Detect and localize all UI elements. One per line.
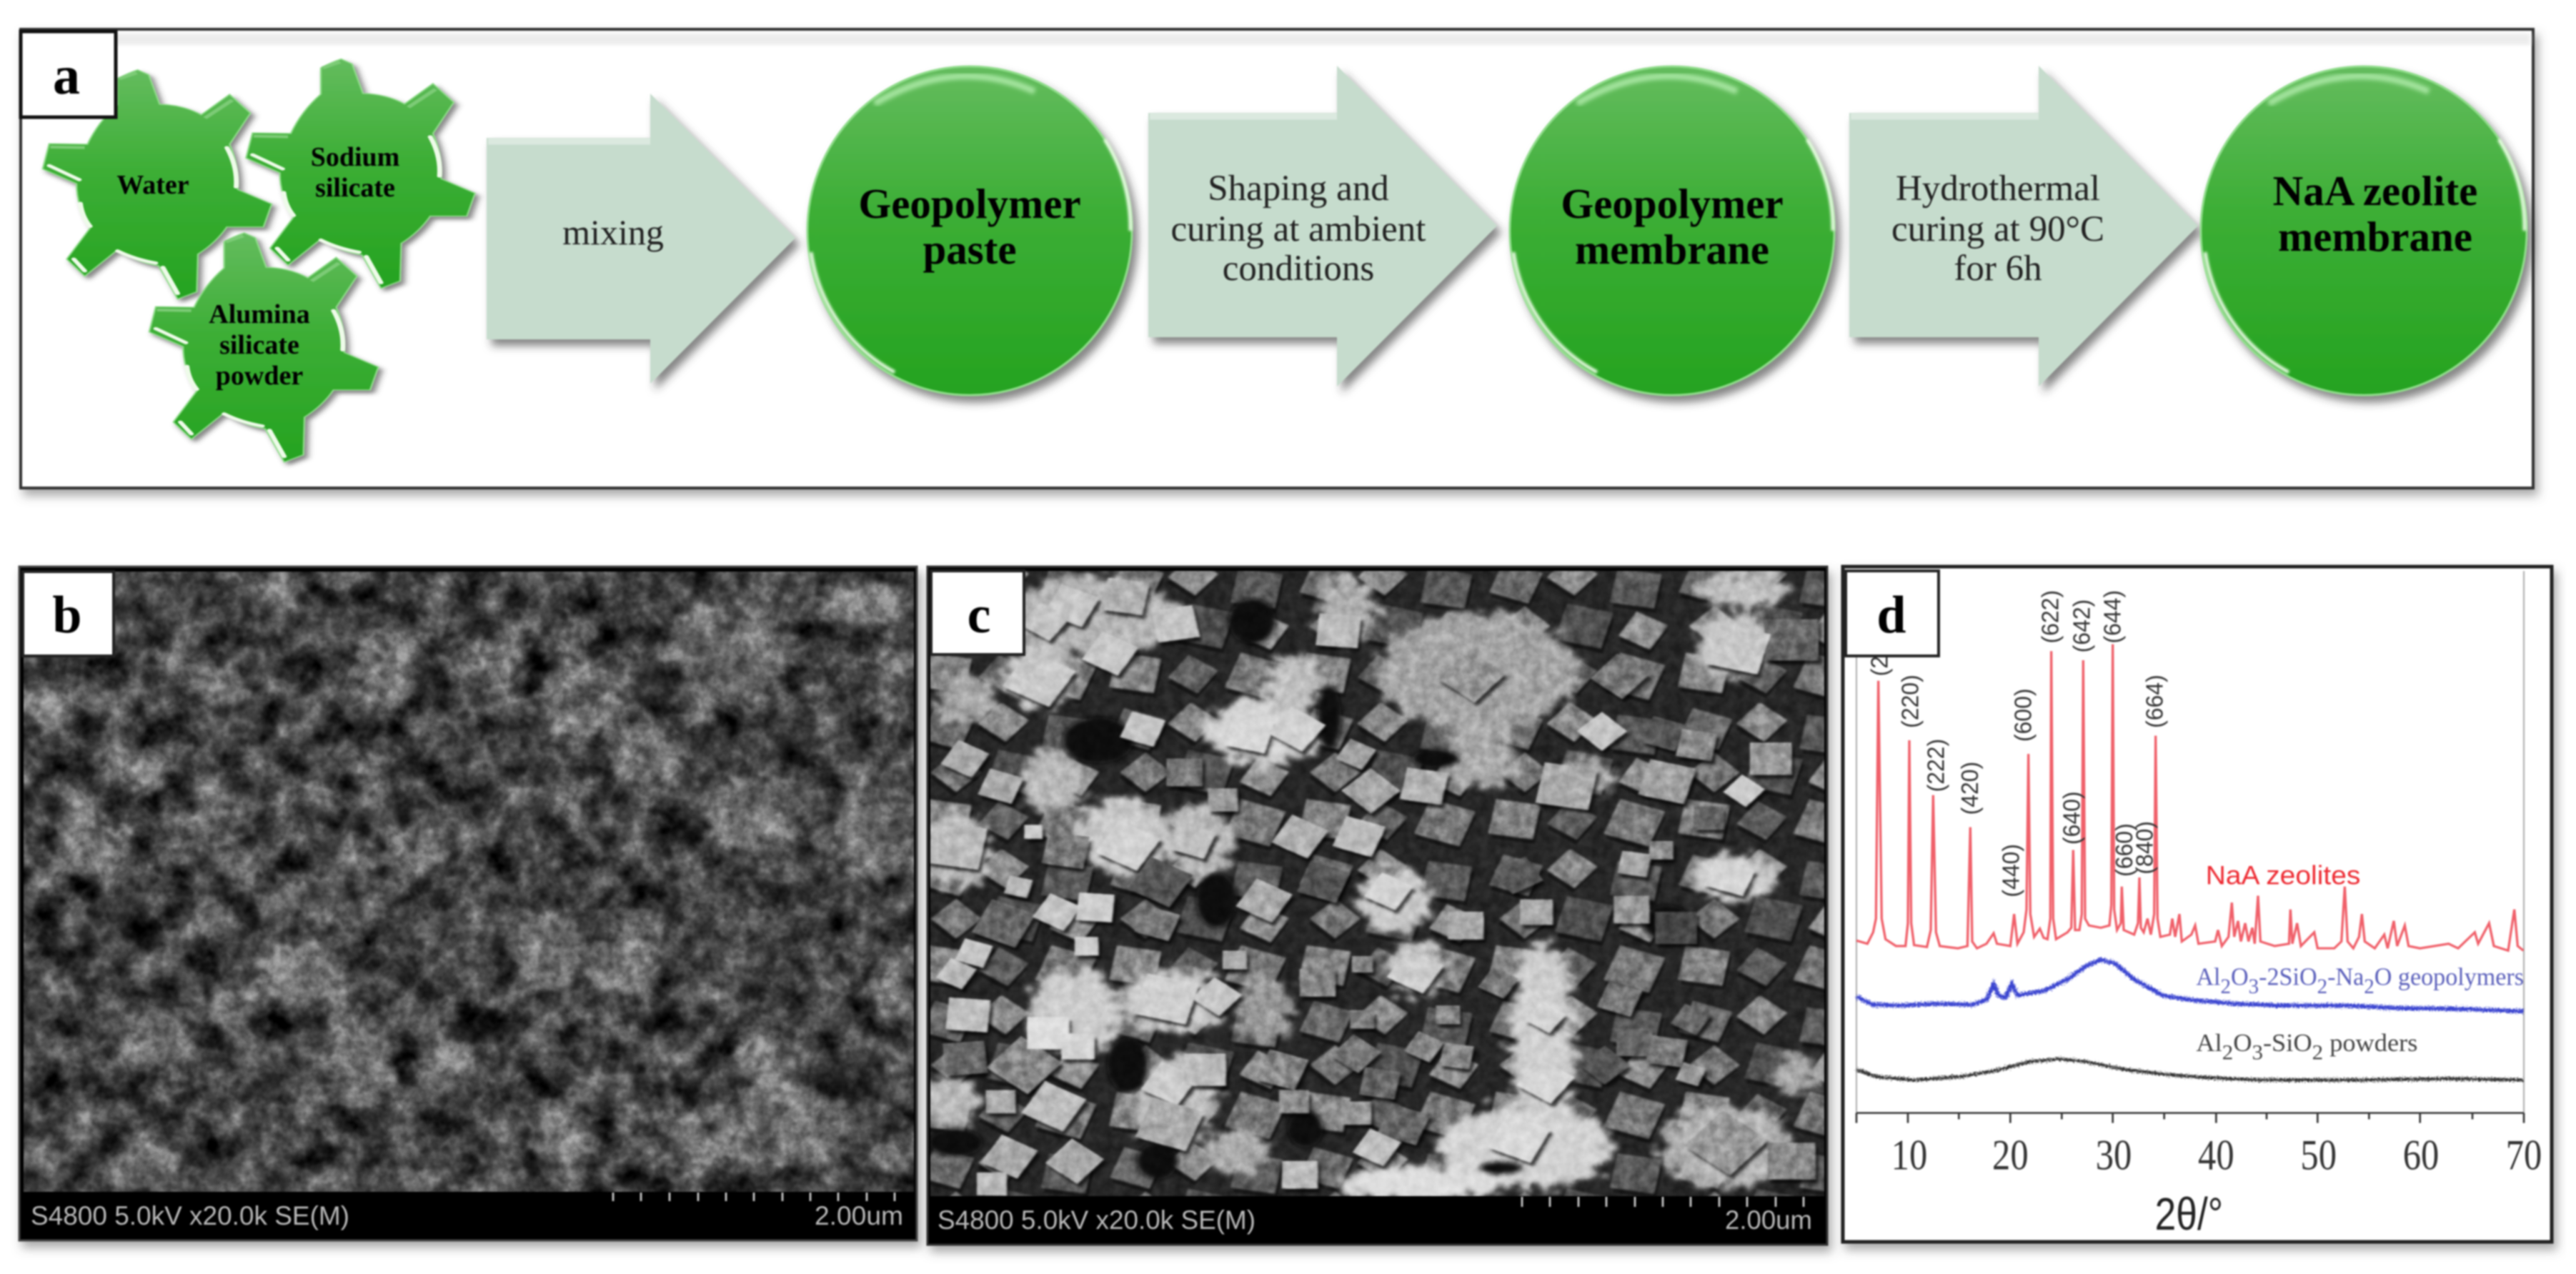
- series label: geopolymers: 2: [2220, 974, 2231, 998]
- arrow: mixing: mixing: [562, 212, 664, 252]
- series label: geopolymers: 2: [2364, 974, 2374, 998]
- panel a: synthesis process flow: [21, 29, 2533, 488]
- scale bar b: 2.00um: [815, 1201, 903, 1230]
- arrow: hydrothermal curing: Hydrothermal: [1896, 169, 2100, 209]
- gear labels: silicate: [219, 330, 299, 360]
- gear labels: powder: [216, 361, 303, 391]
- x axis tick labels: 10: [1891, 1131, 1927, 1179]
- series label: powders: 3: [2252, 1040, 2263, 1065]
- panel d frame: [1843, 567, 2552, 1242]
- scale bar b: S4800 5.0kV x20.0k SE(M): [31, 1201, 349, 1230]
- panel b: SEM image of geopolymer membrane: [19, 567, 918, 1240]
- panel a label: a: [53, 46, 80, 106]
- peak labels: (200): [1866, 623, 1892, 676]
- panel b label: [23, 572, 114, 656]
- x axis tick labels: [1891, 1131, 2542, 1179]
- SEM texture c: [915, 557, 1844, 1211]
- panel d label: d: [1876, 586, 1906, 645]
- panel c label: c: [968, 586, 990, 645]
- gear labels: [116, 142, 399, 391]
- gear labels: Water: [116, 170, 189, 200]
- curve: powders: [1856, 1059, 2523, 1080]
- gear: sodium silicate: [246, 59, 475, 288]
- node: NaA zeolite membrane: membrane: [2278, 213, 2472, 260]
- gear: alumina silicate powder: [149, 233, 378, 462]
- x axis tick labels: 60: [2403, 1131, 2439, 1179]
- gear icons: [43, 59, 475, 462]
- panel a frame: [21, 29, 2533, 488]
- scale bar c: 2.00um: [1725, 1205, 1812, 1235]
- node: geopolymer paste: Geopolymer: [858, 180, 1081, 227]
- x axis tick labels: 40: [2198, 1131, 2234, 1179]
- arrow: hydrothermal curing: curing at 90°C: [1891, 209, 2104, 249]
- SEM texture b: [21, 571, 918, 1192]
- bright aggregates: [920, 571, 1818, 1202]
- panel a label: [21, 31, 116, 117]
- peak labels: (840): [2131, 821, 2158, 875]
- series label: powders: -SiO: [2263, 1030, 2312, 1057]
- peak labels: (644): [2099, 590, 2125, 644]
- peak labels: (660): [2110, 823, 2137, 877]
- curve: geopolymers: [1856, 960, 2523, 1012]
- panel d label: [1846, 571, 1939, 656]
- peak labels: (600): [2009, 688, 2037, 742]
- zeolite cubes: [925, 577, 1818, 1195]
- peak labels: (420): [1956, 762, 1983, 815]
- series label: geopolymers: Al: [2196, 963, 2222, 990]
- axes: [1856, 571, 2524, 1113]
- panel b label: b: [52, 586, 82, 645]
- series label: powders: Al: [2196, 1030, 2222, 1057]
- node: NaA zeolite membrane: [2201, 66, 2527, 395]
- series label: geopolymers: -2SiO: [2259, 963, 2317, 990]
- scale bar c: S4800 5.0kV x20.0k SE(M): [938, 1205, 1255, 1235]
- arrow: shaping and curing: conditions: [1223, 249, 1374, 289]
- panel c frame: [928, 567, 1827, 1245]
- arrow: shaping and curing: [1148, 66, 1497, 387]
- peak labels: (440): [1997, 844, 2024, 897]
- panel b frame: [19, 567, 917, 1240]
- x axis title: 2θ/°: [2155, 1189, 2223, 1240]
- series label: powders: 2: [2222, 1040, 2233, 1065]
- x axis tick labels: 50: [2300, 1131, 2337, 1179]
- peak labels: (222): [1922, 739, 1949, 792]
- series label: NaA zeolites: NaA zeolites: [2206, 861, 2360, 890]
- gear labels: silicate: [315, 173, 395, 203]
- arrow: hydrothermal curing: [1849, 66, 2198, 387]
- top inner shading: [24, 34, 2530, 45]
- node: geopolymer membrane: Geopolymer: [1561, 180, 1784, 227]
- cube packing background: [915, 557, 1844, 1211]
- x axis tick labels: 70: [2506, 1131, 2542, 1179]
- series label: powders: 2: [2312, 1040, 2323, 1065]
- gear labels: Alumina: [209, 299, 310, 329]
- series label: geopolymers: 3: [2249, 974, 2259, 998]
- node: NaA zeolite membrane: NaA zeolite: [2273, 167, 2477, 214]
- node: geopolymer membrane: [1510, 66, 1834, 395]
- peak labels: (622): [2037, 590, 2064, 644]
- panel c: SEM image of NaA zeolite membrane: [915, 557, 1844, 1245]
- series label: powders: O: [2233, 1030, 2252, 1057]
- curve: NaA zeolites: [1856, 645, 2523, 950]
- scale bar c: [930, 1196, 1824, 1242]
- XRD plot: [1856, 571, 2542, 1240]
- arrow: mixing: [487, 94, 795, 384]
- x axis tick labels: 30: [2096, 1131, 2132, 1179]
- gear labels: Sodium: [311, 142, 399, 172]
- series label: powders: powders: [2323, 1030, 2417, 1057]
- node: geopolymer membrane: membrane: [1575, 226, 1769, 273]
- x axis tick labels: 20: [1992, 1131, 2029, 1179]
- peak labels: [1866, 590, 2168, 897]
- node: geopolymer paste: [807, 66, 1132, 395]
- peak labels: (642): [2068, 599, 2095, 652]
- panel d: XRD chart: [1843, 567, 2552, 1242]
- gear: water: [43, 70, 272, 299]
- dark voids: [930, 599, 1691, 1179]
- series label: geopolymers: -Na: [2327, 963, 2364, 990]
- arrow: shaping and curing: Shaping and: [1208, 169, 1389, 209]
- peak labels: (220): [1896, 675, 1924, 728]
- peak labels: (664): [2141, 675, 2168, 728]
- arrow: hydrothermal curing: for 6h: [1954, 249, 2042, 289]
- series label: geopolymers: 2: [2317, 974, 2327, 998]
- series label: geopolymers: O geopolymers: [2374, 963, 2524, 990]
- panel c label: [931, 571, 1024, 655]
- scale bar b: [24, 1192, 914, 1236]
- arrow: shaping and curing: curing at ambient: [1171, 209, 1426, 249]
- series label: geopolymers: O: [2231, 963, 2249, 990]
- peak labels: (640): [2058, 791, 2085, 845]
- node: geopolymer paste: paste: [923, 226, 1017, 273]
